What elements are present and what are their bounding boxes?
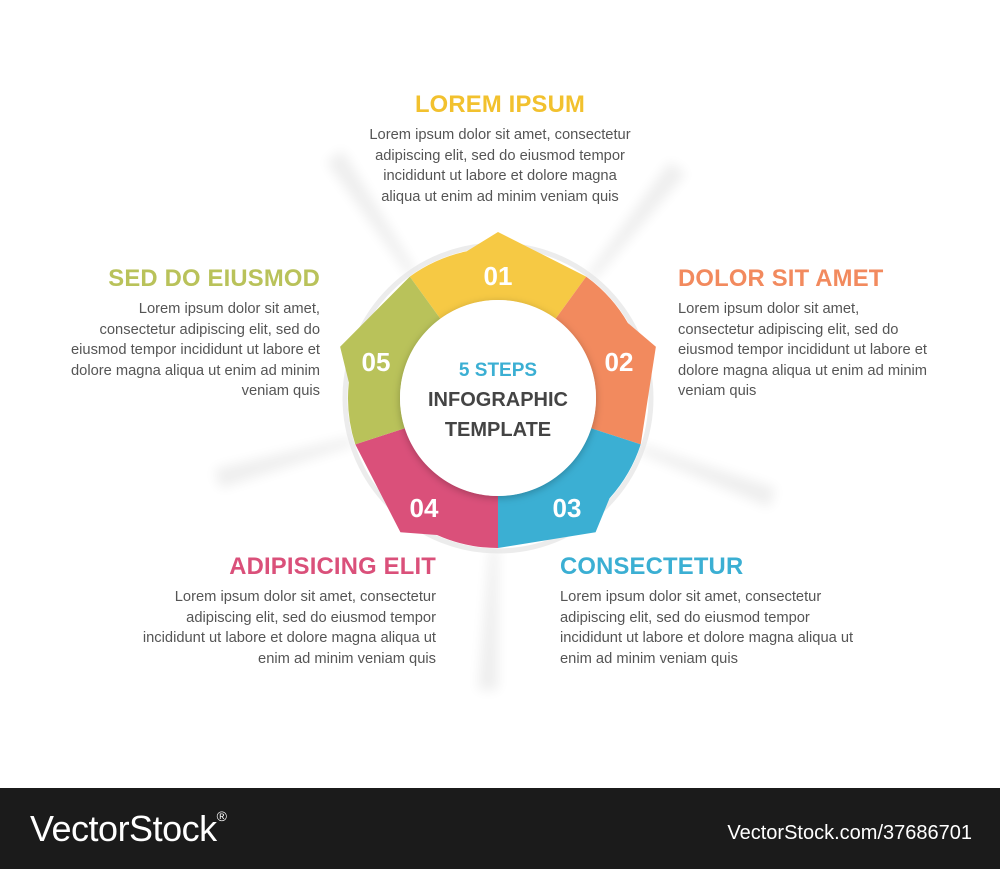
text 05: eiusmod tempor incididunt ut labore et	[71, 342, 320, 358]
center circle	[400, 300, 596, 496]
text 04	[143, 589, 436, 667]
text 05: Lorem ipsum dolor sit amet,	[139, 301, 320, 317]
text 03: adipiscing elit, sed do eiusmod tempor	[560, 610, 810, 626]
numbers: 01	[484, 261, 512, 291]
text 01: adipiscing elit, sed do eiusmod tempor	[375, 148, 625, 164]
title 03: CONSECTETUR	[560, 553, 743, 580]
text 03: enim ad minim veniam quis	[560, 651, 738, 667]
text 05: consectetur adipiscing elit, sed do	[100, 322, 320, 338]
center text	[428, 360, 568, 441]
title 02: DOLOR SIT AMET	[678, 265, 884, 292]
segment 03	[473, 410, 667, 584]
segment 05	[313, 263, 450, 457]
text 02: consectetur adipiscing elit, sed do	[678, 322, 898, 338]
text 05	[71, 301, 320, 399]
text 02	[678, 301, 927, 399]
text 01: incididunt ut labore et dolore magna	[383, 168, 617, 184]
segment 02	[546, 263, 683, 457]
text 03: incididunt ut labore et dolore magna aliqua ut	[560, 630, 853, 646]
text 03: Lorem ipsum dolor sit amet, consectetur	[560, 589, 821, 605]
text 04: enim ad minim veniam quis	[258, 651, 436, 667]
numbers: 02	[605, 347, 633, 377]
text 01: aliqua ut enim ad minim veniam quis	[381, 189, 619, 205]
text 04: incididunt ut labore et dolore magna aliqua ut	[143, 630, 436, 646]
text 02: eiusmod tempor incididunt ut labore et	[678, 342, 927, 358]
shadow rays	[214, 150, 776, 690]
text 01: Lorem ipsum dolor sit amet, consectetur	[369, 127, 631, 143]
numbers	[362, 261, 633, 523]
footer url: VectorStock.com/37686701	[727, 822, 972, 844]
segment 01	[410, 232, 586, 319]
text 02: Lorem ipsum dolor sit amet,	[678, 301, 859, 317]
title 01: LOREM IPSUM	[415, 91, 585, 118]
footer logo: VectorStock®	[30, 808, 226, 849]
text 04: adipiscing elit, sed do eiusmod tempor	[186, 610, 436, 626]
text 02: dolore magna aliqua ut enim ad minim	[678, 363, 927, 379]
text 03	[560, 589, 853, 667]
center text: 5 STEPS	[459, 360, 537, 381]
text 01	[369, 127, 631, 511]
title 05: SED DO EIUSMOD	[108, 265, 320, 292]
title 04: ADIPISICING ELIT	[229, 553, 436, 580]
footer bar	[0, 788, 1000, 869]
center text: INFOGRAPHIC	[428, 389, 568, 411]
text 04: Lorem ipsum dolor sit amet, consectetur	[175, 589, 436, 605]
segment 04	[329, 410, 523, 584]
text 05: dolore magna aliqua ut enim ad minim	[71, 363, 320, 379]
center text: TEMPLATE	[445, 419, 551, 441]
text 02: veniam quis	[678, 383, 756, 399]
text 05: veniam quis	[242, 383, 320, 399]
numbers: 04	[410, 493, 439, 523]
numbers: 03	[553, 493, 581, 523]
numbers: 05	[362, 347, 390, 377]
outer faint ring	[345, 245, 651, 551]
